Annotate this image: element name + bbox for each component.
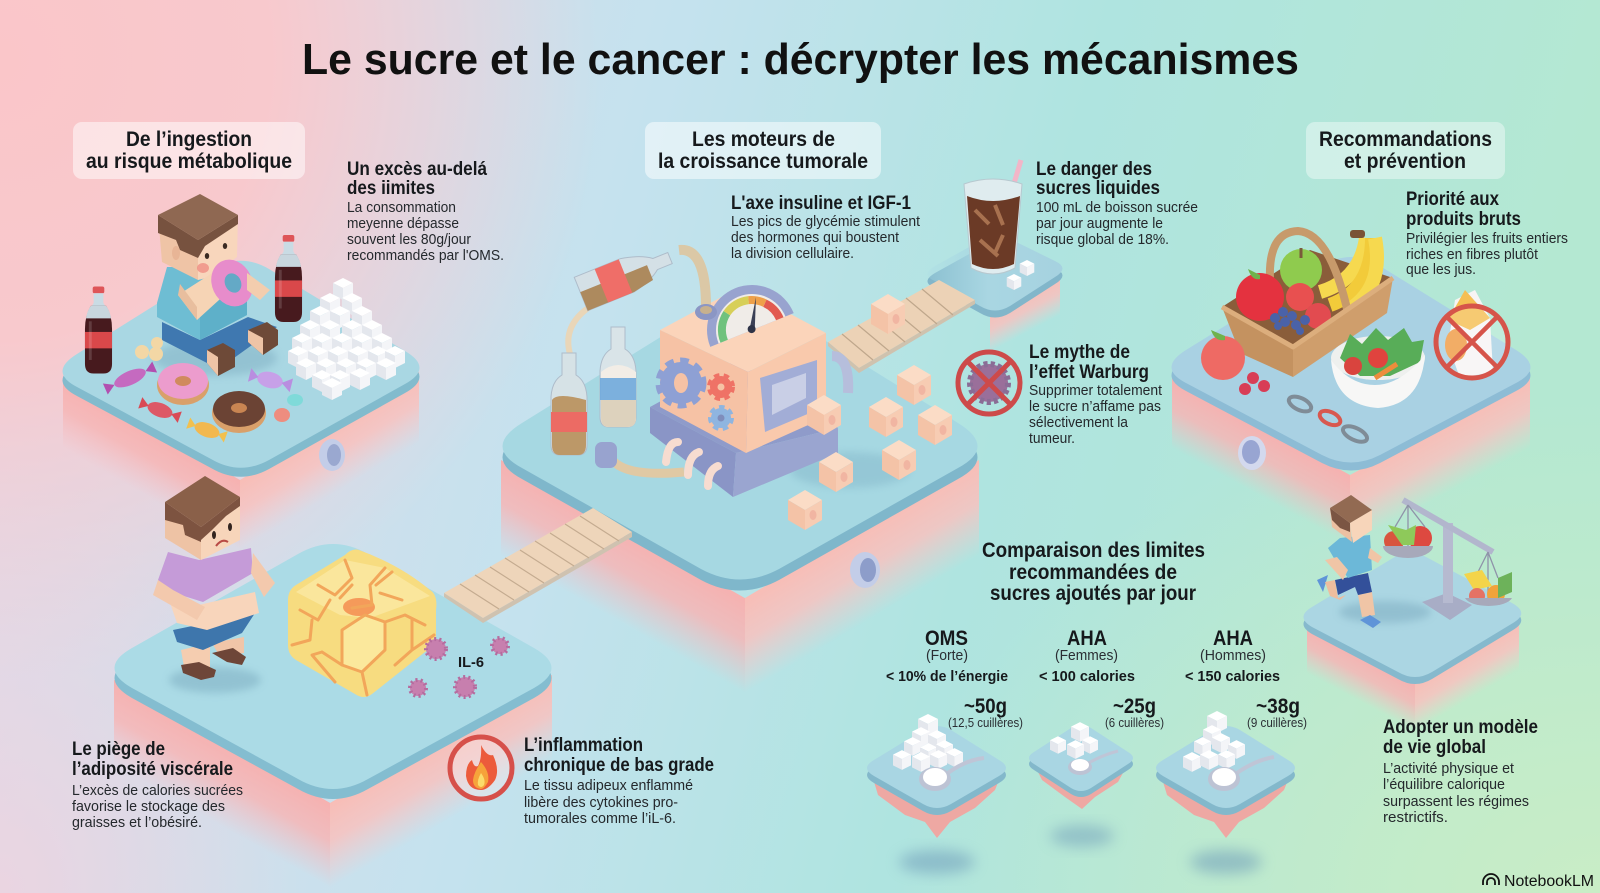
pipes: [595, 356, 848, 486]
section heading: tumour growth: Les moteurs de: [692, 128, 835, 151]
text block: insulin axis: des hormones qui boustent: [731, 229, 900, 246]
spoon: [919, 758, 984, 791]
text block: liquid sugars: risque global de 18%.: [1036, 231, 1169, 248]
platform: recommendations: [1172, 257, 1530, 545]
text block: excess sugar: La consommation: [347, 199, 456, 216]
text block: liquid sugars: [1036, 159, 1198, 248]
icon: gears: [660, 362, 732, 428]
text block: raw products: que les jus.: [1406, 261, 1476, 278]
column: AHA women limit: < 100 calories: [1039, 668, 1135, 685]
title: Le sucre et le cancer : décrypter les mécanismes: [302, 35, 1299, 84]
column: AHA men limit: < 150 calories: [1185, 668, 1280, 685]
column: AHA women limit: AHA: [1067, 627, 1107, 650]
text block: raw products: [1406, 189, 1568, 278]
column: AHA men limit: (Hommes): [1200, 647, 1266, 664]
column: AHA women limit: [1039, 627, 1164, 730]
icon: vegetable bowl: [1331, 328, 1425, 408]
column: AHA women limit: ~25g: [1113, 695, 1156, 718]
text block: visceral fat: favorise le stockage des: [72, 798, 225, 815]
text block: visceral fat: Le piège de: [72, 739, 165, 760]
text block: excess sugar: meyenne dépasse: [347, 215, 459, 232]
text block: insulin axis: L'axe insuline et IGF-1: [731, 193, 911, 214]
icon: broken chain: [1287, 393, 1369, 445]
platform: tumor growth engine: [501, 300, 979, 693]
text block: liquid sugars: sucres liquides: [1036, 178, 1160, 199]
island: 38g sugar: [1156, 711, 1295, 874]
icon: flame: [450, 737, 512, 799]
icon: gauge: [693, 271, 795, 350]
column: OMS limit: (12,5 cuillères): [948, 716, 1023, 730]
platform: drink: [928, 236, 1062, 352]
text block: Warburg myth: sélectivement la: [1029, 414, 1129, 431]
column: AHA women limit: (Femmes): [1055, 647, 1118, 664]
text block: raw products: Priorité aux: [1406, 189, 1499, 210]
chart heading: daily limits comparison: [982, 539, 1205, 605]
icon: worried overweight boy: [153, 476, 275, 693]
icon: cola bottles: [85, 235, 302, 374]
text block: lifestyle: de vie global: [1383, 737, 1486, 758]
section heading: recommendations: et prévention: [1344, 150, 1466, 173]
section heading: tumour growth: la croissance tumorale: [658, 150, 868, 173]
text block: excess sugar: [347, 159, 504, 264]
text block: lifestyle: l’équilibre calorique: [1383, 776, 1505, 793]
chart heading: daily limits comparison: sucres ajoutés par jour: [990, 582, 1196, 605]
icon: small apple and berries: [1201, 330, 1270, 395]
text block: raw products: Privilégier les fruits entiers: [1406, 230, 1568, 247]
column: AHA women limit: (6 cuillères): [1105, 716, 1164, 730]
icon: eating boy: [153, 194, 278, 376]
donut held: [204, 253, 260, 313]
platform: metabolic ingestion: [62, 261, 420, 550]
icon: runner: [1317, 495, 1431, 628]
text block: lifestyle: L’activité physique et: [1383, 760, 1515, 777]
text block: inflammation: Le tissu adipeux enflammé: [524, 777, 693, 794]
icon: iced drink: [964, 160, 1034, 290]
text block: lifestyle: [1383, 717, 1538, 826]
icon: sweets and donuts: [102, 337, 303, 443]
chart heading: daily limits comparison: recommandées de: [1009, 561, 1177, 584]
section heading: ingestion: [73, 122, 305, 179]
text block: insulin axis: Les pics de glycémie stimulent: [731, 213, 921, 230]
column: OMS limit: [886, 627, 1023, 730]
text block: inflammation: libère des cytokines pro-: [524, 794, 678, 811]
text block: liquid sugars: 100 mL de boisson sucrée: [1036, 199, 1198, 216]
text block: excess sugar: des iimites: [347, 178, 435, 199]
text block: lifestyle: Adopter un modèle: [1383, 717, 1538, 738]
section heading: recommendations: Recommandations: [1319, 128, 1492, 151]
chart heading: daily limits comparison: Comparaison des limites: [982, 539, 1205, 562]
icon: sugar cube pile: [288, 278, 405, 400]
icon: no juice: [1436, 290, 1508, 378]
icon: visceral fat cube: [288, 550, 436, 697]
machine panel: [760, 360, 817, 432]
icon: tan bottle: [551, 353, 587, 455]
icon: IL-6 cytokines: IL-6: [458, 654, 484, 671]
bridge: centre to drink: [828, 280, 975, 373]
column: OMS limit: OMS: [925, 627, 968, 650]
column: OMS limit: < 10% de l’énergie: [886, 668, 1008, 685]
port: [1238, 436, 1266, 470]
text block: excess sugar: souvent les 80g/jour: [347, 231, 471, 248]
text block: lifestyle: restrictifs.: [1383, 809, 1448, 826]
icon: soft drink machine: [551, 241, 952, 530]
icon: Warburg forbidden: [958, 352, 1020, 414]
machine base: [650, 360, 838, 497]
text block: liquid sugars: par jour augmente le: [1036, 215, 1163, 232]
text block: Warburg myth: l’effet Warburg: [1029, 362, 1149, 383]
section heading: ingestion: au risque métabolique: [86, 150, 292, 173]
text block: lifestyle: surpassent les régimes: [1383, 793, 1529, 810]
icon: pouring bottle: [568, 241, 717, 354]
cubes: [1050, 722, 1098, 759]
bridge: adipose to centre: [444, 508, 632, 623]
platform: lifestyle: [1304, 553, 1521, 731]
text block: visceral fat: l’adiposité viscérale: [72, 759, 233, 780]
section heading: tumour growth: [645, 122, 881, 179]
text block: inflammation: L’inflammation: [524, 735, 643, 756]
text block: raw products: produits bruts: [1406, 209, 1521, 230]
text block: visceral fat: L’excès de calories sucrées: [72, 782, 243, 799]
text block: liquid sugars: Le danger des: [1036, 159, 1152, 180]
text block: Warburg myth: Supprimer totalement: [1029, 382, 1163, 399]
port: [319, 439, 345, 471]
text block: inflammation: chronique de bas grade: [524, 755, 714, 776]
text block: excess sugar: Un excès au-delá: [347, 159, 487, 180]
text block: Warburg myth: tumeur.: [1029, 430, 1075, 447]
icon: fruit basket: [1222, 230, 1393, 377]
column: OMS limit: (Forte): [926, 647, 968, 664]
island: 25g sugar: [1029, 722, 1133, 847]
column: AHA men limit: AHA: [1213, 627, 1253, 650]
logo: NotebookLM: NotebookLM: [1504, 873, 1594, 890]
icon: IL-6 cytokines: [410, 638, 508, 697]
text block: insulin axis: la division cellulaire.: [731, 245, 854, 262]
platform: adipose tissue: [114, 544, 552, 888]
icon: milk bottle: [600, 327, 636, 427]
peach cubes: [788, 294, 952, 530]
text block: Warburg myth: le sucre n’affame pas: [1029, 398, 1161, 415]
section heading: ingestion: De l’ingestion: [126, 128, 252, 151]
text block: raw products: riches en fibres plutôt: [1406, 246, 1539, 263]
text block: visceral fat: [72, 739, 243, 831]
cubes: [1183, 711, 1245, 772]
machine cube: [660, 287, 826, 453]
text block: visceral fat: graisses et l’obésiré.: [72, 814, 202, 831]
text block: insulin axis: [731, 193, 921, 262]
port: [850, 552, 880, 588]
column: AHA men limit: (9 cuillères): [1247, 716, 1307, 730]
text block: excess sugar: recommandés par l'OMS.: [347, 247, 504, 264]
column: AHA men limit: ~38g: [1256, 695, 1300, 718]
icon: balance scale: [1383, 500, 1512, 620]
cubes: [893, 714, 963, 772]
section heading: recommendations: [1306, 122, 1505, 179]
text block: inflammation: tumorales comme l’iL-6.: [524, 810, 676, 827]
text block: inflammation: [524, 735, 714, 827]
column: AHA men limit: [1185, 627, 1307, 730]
spoon: [1208, 757, 1274, 791]
spoon: [1068, 751, 1118, 775]
island: 50g sugar: [867, 714, 1006, 874]
column: OMS limit: ~50g: [964, 695, 1007, 718]
text block: Warburg myth: [1029, 342, 1163, 447]
text block: Warburg myth: Le mythe de: [1029, 342, 1130, 363]
